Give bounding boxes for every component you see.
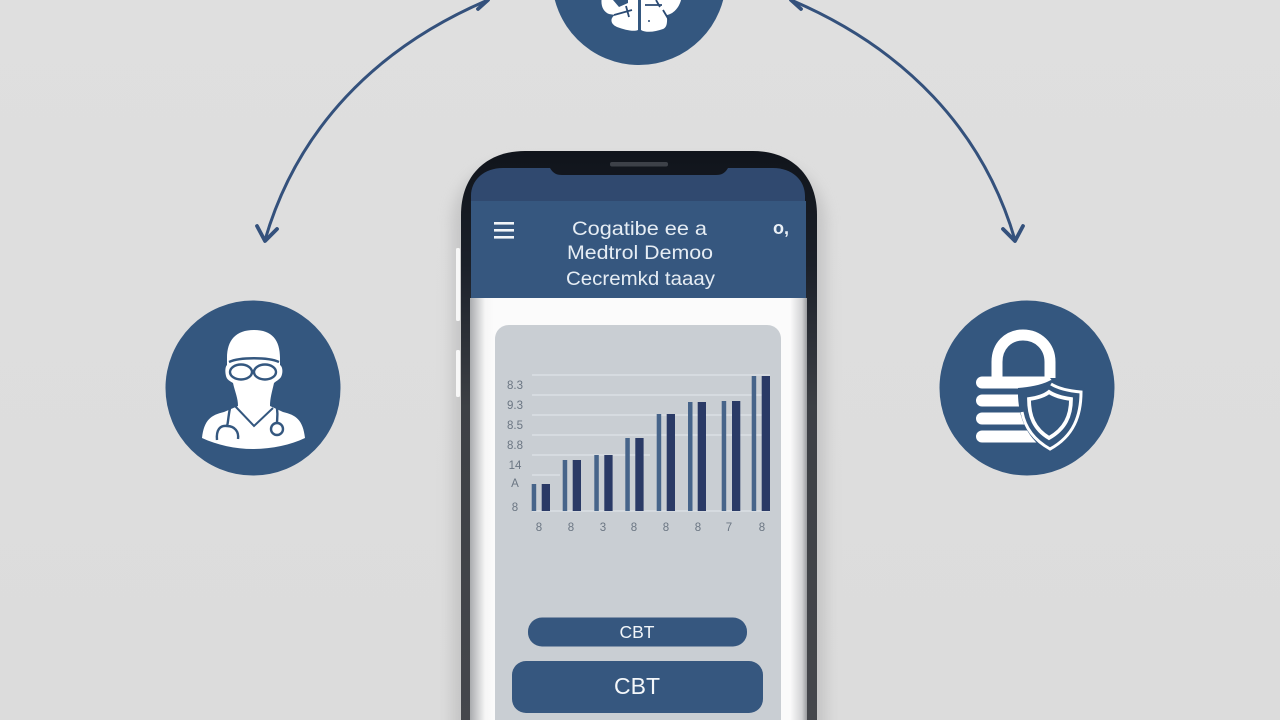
phone soft shadow <box>452 160 826 720</box>
dark series bars <box>542 376 770 511</box>
large CBT button <box>512 661 763 713</box>
header title: Cecremkd taaay <box>566 268 715 290</box>
status bar <box>471 168 805 201</box>
y axis labels: 8.8 <box>507 440 523 452</box>
side buttons <box>456 248 460 397</box>
y axis labels: 8.3 <box>507 380 523 392</box>
light series bars <box>532 376 756 511</box>
icon: lock and shield in circle <box>940 300 1114 476</box>
x axis labels: 8 <box>536 522 542 534</box>
x axis labels: 7 <box>726 522 732 534</box>
content panel <box>495 325 781 720</box>
x axis labels: 8 <box>695 522 701 534</box>
phone body <box>461 151 817 720</box>
phone screen <box>470 298 807 720</box>
grid lines <box>532 375 770 511</box>
x axis labels: 8 <box>631 522 637 534</box>
y axis labels <box>507 380 523 514</box>
x axis labels: 3 <box>600 522 606 534</box>
y axis labels: 14 <box>509 460 522 472</box>
arrow: top brain to doctor <box>257 0 488 241</box>
doctor silhouette <box>202 330 305 449</box>
x axis labels <box>536 522 765 534</box>
header title <box>566 218 715 290</box>
x axis labels: 8 <box>759 522 765 534</box>
shield <box>1018 380 1084 453</box>
y axis labels: 8.5 <box>507 420 523 432</box>
y axis labels: A <box>511 478 519 490</box>
padlock stacked rows <box>976 376 1052 442</box>
x axis labels: 8 <box>568 522 574 534</box>
profile glyph: o, <box>773 218 789 238</box>
icon: brain in circle <box>552 0 726 65</box>
y axis labels: 9.3 <box>507 400 523 412</box>
phone <box>452 151 826 720</box>
speaker <box>610 162 668 166</box>
icon: doctor in circle <box>166 300 340 476</box>
x axis labels: 8 <box>663 522 669 534</box>
glasses and stethoscope <box>217 358 283 440</box>
small CBT button <box>528 618 747 646</box>
header title: Cogatibe ee a <box>572 218 707 240</box>
menu icon <box>494 222 514 239</box>
y axis labels: 8 <box>512 502 518 514</box>
header title: Medtrol Demoo <box>567 242 713 264</box>
app header <box>471 201 806 298</box>
arrow: top brain to security <box>791 0 1023 241</box>
small CBT button: CBT <box>620 622 655 642</box>
large CBT button: CBT <box>614 673 660 699</box>
bar chart <box>507 375 770 534</box>
padlock shackle <box>997 335 1050 378</box>
